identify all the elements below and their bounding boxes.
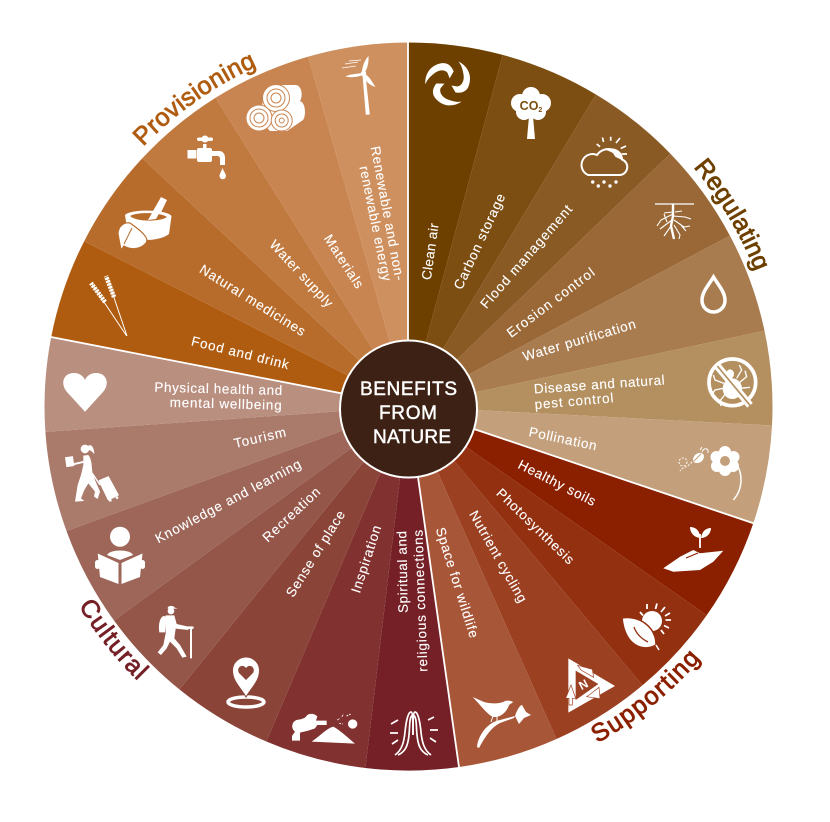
icon: nitrogen cycle bbox=[566, 658, 615, 713]
label: renewable and non-renewable energy: Renewable and non- bbox=[368, 145, 407, 281]
label: nutrient cycling: Nutrient cycling bbox=[466, 508, 530, 605]
panel: supporting bbox=[419, 430, 753, 767]
centre title: Benefits from Nature: FROM bbox=[379, 403, 437, 424]
wedge: flood management bbox=[408, 94, 670, 406]
label: physical health and mental wellbeing bbox=[154, 380, 282, 413]
icon: heart bbox=[63, 373, 107, 412]
label: spiritual and religious connections bbox=[394, 529, 430, 672]
label: sense of place: Sense of place bbox=[283, 508, 348, 600]
wedge: water supply bbox=[142, 98, 409, 407]
wedge: healthy soils bbox=[408, 406, 753, 615]
icon: air swirl bbox=[420, 59, 470, 112]
panel: provisioning bbox=[51, 42, 408, 392]
label: tourism: Tourism bbox=[232, 425, 287, 451]
heading: Supporting: Supporting bbox=[591, 650, 702, 742]
label: carbon storage: Carbon storage bbox=[451, 191, 508, 292]
label: erosion control: Erosion control bbox=[504, 265, 598, 340]
wedge: spiritual connections bbox=[365, 406, 459, 771]
icon: praying hands bbox=[390, 712, 438, 755]
icon: photographer and hill bbox=[292, 714, 357, 744]
label: water supply: Water supply bbox=[267, 237, 336, 310]
icon: rain cloud and sun bbox=[582, 137, 627, 188]
wedge: disease and pest control bbox=[408, 331, 772, 426]
icon: wheat bbox=[91, 276, 127, 336]
label: photosynthesis: Photosynthesis bbox=[493, 486, 577, 567]
label: water purification: Water purification bbox=[521, 316, 637, 364]
label: spiritual and religious connections: religious connections bbox=[411, 529, 430, 672]
wedge: physical health and wellbeing bbox=[45, 337, 409, 432]
icon: tree with CO2 bbox=[511, 87, 551, 139]
icon: traveller with suitcase bbox=[65, 445, 118, 502]
icon: stacked logs bbox=[246, 84, 305, 131]
wedge: carbon storage bbox=[408, 55, 596, 407]
label: flood management: Flood management bbox=[477, 202, 575, 311]
label: natural medicines: Natural medicines bbox=[197, 262, 308, 339]
label: pollination: Pollination bbox=[527, 424, 598, 453]
label: recreation: Recreation bbox=[260, 484, 323, 545]
wedge: recreation bbox=[114, 406, 408, 689]
icon: no ticks sign bbox=[709, 359, 756, 406]
wedge: erosion control bbox=[408, 154, 730, 406]
icon: tree with CO2: CO bbox=[520, 99, 538, 113]
label: inspiration: Inspiration bbox=[348, 524, 384, 595]
wedge: water purification bbox=[408, 236, 764, 406]
wedge: inspiration bbox=[266, 406, 408, 768]
label: spiritual and religious connections: Spiritual and bbox=[394, 531, 411, 613]
centre title: Benefits from Nature: BENEFITS bbox=[360, 379, 457, 400]
panel: cultural bbox=[44, 338, 458, 771]
icon: seedling in hand bbox=[663, 527, 723, 572]
label: food and drink: Food and drink bbox=[190, 333, 291, 372]
panel: regulating bbox=[408, 42, 772, 522]
icon: wind turbine bbox=[342, 56, 376, 115]
icon: flower and bee bbox=[679, 446, 741, 500]
wedge: materials bbox=[216, 57, 408, 406]
icon: roots bbox=[655, 204, 694, 239]
wedge: food and drink bbox=[51, 241, 408, 406]
icon: bird on branch bbox=[473, 697, 531, 748]
icon: tree with CO2: 2 bbox=[538, 107, 542, 114]
label: space for wildlife: Space for wildlife bbox=[433, 525, 482, 640]
wedge: photosynthesis bbox=[408, 406, 707, 685]
icon: water tap bbox=[188, 136, 226, 179]
wedge: space for wildlife bbox=[408, 406, 556, 767]
label: disease and natural pest control: Disease and natural bbox=[533, 372, 665, 397]
wedge: tourism bbox=[45, 406, 409, 531]
label: knowledge and learning: Knowledge and learning bbox=[153, 456, 304, 546]
wedge: clean air bbox=[408, 42, 503, 406]
wedge: sense of place bbox=[179, 406, 408, 742]
centre title: Benefits from Nature bbox=[360, 379, 457, 448]
label: physical health and mental wellbeing: mental wellbeing bbox=[170, 395, 282, 413]
label: renewable and non-renewable energy: renewable energy bbox=[356, 165, 395, 282]
centre circle bbox=[340, 340, 477, 478]
label: disease and natural pest control bbox=[533, 372, 665, 412]
category divider lines bbox=[51, 42, 754, 770]
label: healthy soils: Healthy soils bbox=[516, 457, 598, 509]
icon: map pin with heart bbox=[228, 657, 264, 707]
heading: Provisioning: Provisioning bbox=[132, 54, 256, 146]
icon: water drop bbox=[702, 277, 725, 312]
icon: leaf and sun bbox=[622, 604, 671, 650]
label: physical health and mental wellbeing: Physical health and bbox=[154, 380, 282, 398]
icon: person reading bbox=[95, 527, 145, 584]
icon: nitrogen cycle: N bbox=[576, 676, 591, 693]
heading: Cultural: Cultural bbox=[82, 600, 150, 680]
wedge: natural medicines bbox=[84, 158, 408, 406]
label: materials: Materials bbox=[321, 232, 367, 291]
label: disease and natural pest control: pest control bbox=[534, 390, 614, 412]
centre title: Benefits from Nature: NATURE bbox=[373, 427, 451, 448]
heading: Regulating: Regulating bbox=[694, 157, 768, 271]
label: clean air: Clean air bbox=[419, 222, 442, 281]
wedge: renewable energy bbox=[308, 42, 408, 406]
icon: mortar and pestle with leaf bbox=[118, 197, 172, 250]
icon: hiker bbox=[158, 606, 194, 658]
wedge: knowledge and learning bbox=[66, 406, 408, 620]
wedge: pollination bbox=[408, 406, 772, 523]
wedge: nutrient cycling bbox=[408, 406, 642, 739]
